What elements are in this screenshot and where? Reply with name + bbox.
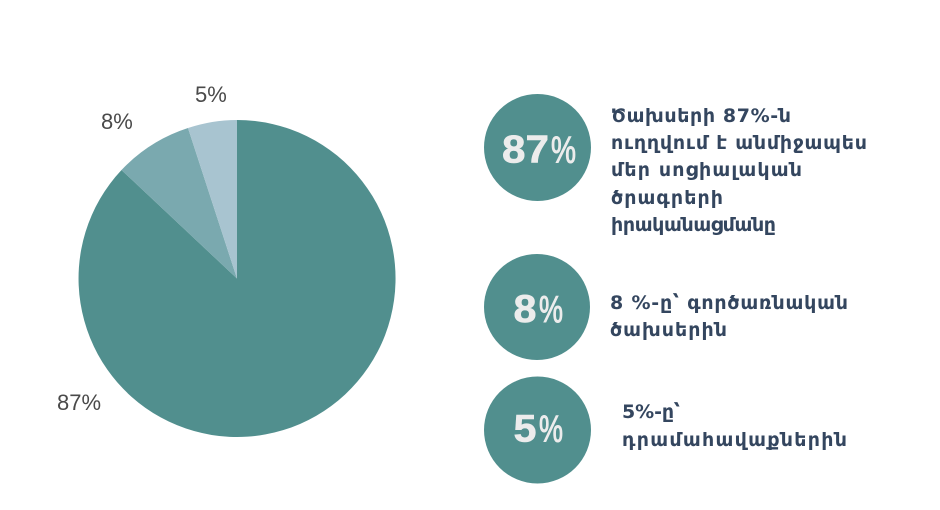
badge: 8%: 8 — [514, 288, 536, 331]
text: 87% description: իրականացմանը — [611, 214, 776, 236]
badge: 5%: 5 — [514, 408, 536, 450]
pie label: 87%: 87% — [57, 390, 101, 415]
badge: 8%: % — [539, 289, 563, 331]
text: 87% description: ուղղվում է անմիջապես — [611, 132, 867, 154]
slice: 8% — [122, 128, 237, 278]
badge: 5% — [484, 376, 591, 484]
text: 87% description: ծրագրերի — [611, 187, 723, 209]
badge: 87% — [484, 94, 591, 201]
text: 5% description: 5%-ը՝ — [622, 401, 680, 423]
text: 5% description — [622, 401, 847, 451]
text: 87% description: մեր սոցիալական — [611, 159, 802, 181]
text: 8% description — [610, 292, 848, 341]
text: 8% description: 8 %-ը՝ գործառնական — [610, 292, 848, 314]
badge: 5%: % — [539, 408, 563, 450]
text: 87% description — [611, 105, 867, 236]
slice: 5% — [188, 120, 237, 278]
slice: 87% — [79, 120, 396, 437]
badge: 8% — [484, 254, 590, 360]
pie chart — [79, 120, 396, 437]
text: 5% description: դրամահավաքներին — [622, 429, 847, 451]
badge: 87%: % — [551, 130, 576, 172]
pie label: 8%: 8% — [101, 109, 133, 134]
pie label: 5%: 5% — [195, 82, 227, 107]
text: 8% description: ծախսերին — [610, 319, 727, 341]
text: 87% description: Ծախսերի 87%-ն — [611, 105, 791, 127]
badge: 87%: 87 — [502, 128, 549, 172]
